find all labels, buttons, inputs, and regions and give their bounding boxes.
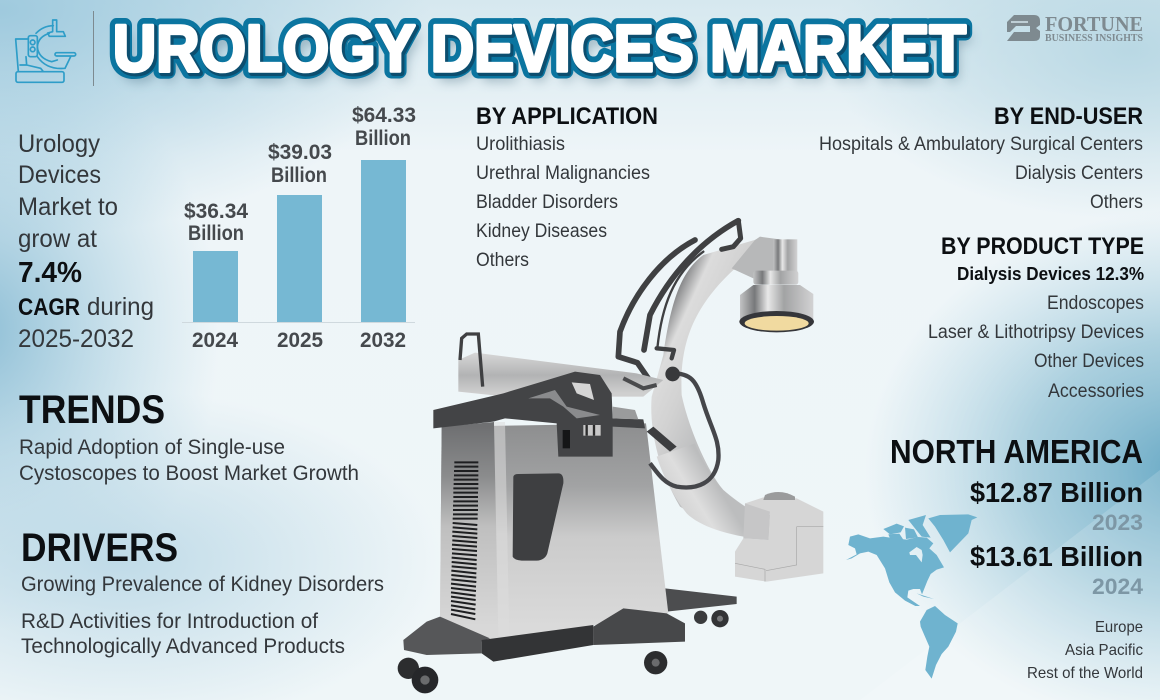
title: UROLOGY DEVICES MARKET: [115, 13, 968, 87]
x-ray source head: [732, 237, 814, 332]
panel: north america: [890, 433, 1144, 682]
panel: by product type: Accessories: [1048, 381, 1144, 402]
dark top assembly: [433, 372, 645, 457]
panel: drivers: R&D Activities for Introduction of: [21, 610, 318, 633]
wheels: [398, 651, 667, 693]
cable: [650, 373, 719, 487]
cabinet: [440, 422, 668, 642]
logo: Fortune Business Insights: FORTUNE: [1045, 12, 1143, 36]
panel: by end-user: Others: [1090, 192, 1143, 213]
panel: trends: Rapid Adoption of Single-use: [19, 436, 285, 459]
panel: north america: Rest of the World: [1027, 665, 1143, 682]
title: UROLOGY DEVICES MARKET: [113, 11, 966, 85]
text: CAGR statement: 2025-2032: [18, 325, 134, 353]
text: CAGR statement: [18, 130, 154, 353]
top console: [458, 353, 663, 397]
bar chart: Billion: [355, 127, 411, 150]
panel: north america: 2023: [1092, 510, 1143, 535]
panel: by application: BY APPLICATION: [476, 103, 658, 130]
panel: by application: Urethral Malignancies: [476, 163, 650, 184]
panel: north america: 2024: [1092, 574, 1144, 599]
panel: north america: $13.61 Billion: [970, 541, 1143, 572]
panel: north america: $12.87 Billion: [970, 477, 1143, 508]
panel: north america: Asia Pacific: [1065, 642, 1143, 659]
text: CAGR statement: 7.4%: [18, 257, 82, 289]
panel: north america: Europe: [1095, 619, 1143, 636]
icon: c-arm scanner: [16, 20, 76, 82]
panel: by application: Others: [476, 250, 529, 271]
panel: drivers: [21, 526, 384, 658]
bar chart: Billion: [188, 222, 244, 245]
console handle: [460, 334, 483, 387]
bar chart: $39.03: [268, 141, 332, 164]
panel: trends: [19, 388, 359, 485]
upper arm handles: [618, 221, 741, 390]
panel: by application: Urolithiasis: [476, 134, 565, 155]
panel: by product type: Other Devices: [1034, 351, 1144, 372]
back foot: [665, 588, 737, 627]
logo: Fortune Business Insights: [1007, 12, 1143, 44]
panel: by application: Kidney Diseases: [476, 221, 607, 242]
text: CAGR statement: Market to: [18, 193, 118, 221]
panel: by end-user: Hospitals & Ambulatory Surgical Centers: [819, 134, 1143, 155]
bar chart: 2024: [192, 329, 238, 352]
map: the Americas: [846, 514, 977, 679]
title: UROLOGY DEVICES MARKET: [113, 11, 966, 85]
panel: trends: TRENDS: [19, 388, 165, 432]
c-arm: [651, 239, 770, 540]
bar chart: $64.33: [352, 104, 416, 127]
panel: by product type: Dialysis Devices 12.3%: [957, 264, 1144, 284]
panel: drivers: DRIVERS: [21, 526, 178, 570]
text: CAGR statement: grow at: [18, 225, 97, 253]
bar chart: [182, 104, 416, 352]
bar chart: $36.34: [184, 200, 248, 223]
bar chart: Billion: [271, 164, 327, 187]
panel: by end-user: [819, 103, 1143, 213]
text: CAGR statement: Urology: [18, 130, 100, 158]
bar chart: 2032: [360, 329, 406, 352]
panel: by end-user: BY END-USER: [994, 103, 1143, 130]
logo: Fortune Business Insights: BUSINESS INSIGHTS: [1045, 33, 1143, 44]
console detail: [528, 382, 638, 448]
cabinet door panel: [513, 473, 563, 561]
panel: drivers: Growing Prevalence of Kidney Disorders: [21, 573, 384, 596]
title: UROLOGY DEVICES MARKET: [118, 20, 971, 94]
base: [403, 608, 685, 662]
panel: by application: Bladder Disorders: [476, 192, 618, 213]
panel: trends: Cystoscopes to Boost Market Growth: [19, 462, 359, 485]
text: CAGR statement: during: [87, 293, 154, 321]
bar chart: 2025: [277, 329, 323, 352]
panel: by product type: [928, 233, 1144, 402]
text: CAGR statement: Devices: [18, 161, 101, 189]
panel: by application: [476, 103, 658, 271]
divider: [93, 11, 94, 86]
cabinet vent: [451, 462, 478, 619]
detector box: [735, 492, 823, 582]
text: CAGR statement: CAGR: [18, 294, 80, 321]
panel: by end-user: Dialysis Centers: [1015, 163, 1143, 184]
panel: by product type: Laser & Lithotripsy Devices: [928, 322, 1144, 343]
panel: drivers: Technologically Advanced Products: [21, 635, 345, 658]
panel: by product type: Endoscopes: [1047, 293, 1144, 314]
illustration: mobile c-arm machine: [398, 221, 823, 693]
